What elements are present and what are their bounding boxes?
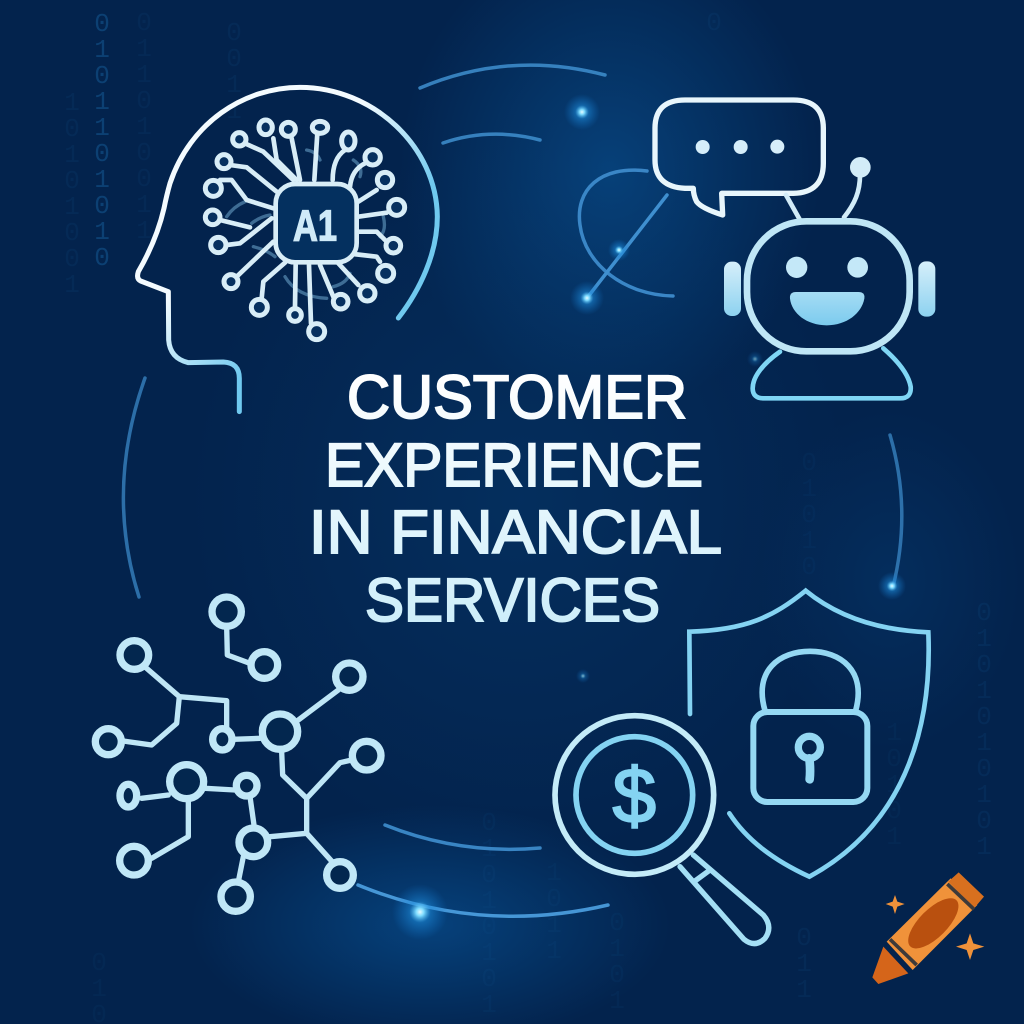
typing dots [696,140,784,154]
background binary digit columns: 01010101 [481,808,497,1020]
title [309,363,722,634]
network links [123,627,352,882]
sparkles [886,895,984,960]
background binary digit columns: 0101 [609,908,625,1016]
background binary digit columns: 1011 [546,858,562,966]
background binary digit columns: 10101 [886,718,902,852]
bubble connector and antenna [786,175,860,220]
padlock shackle [762,651,858,711]
title: EXPERIENCE [325,431,703,499]
AI chip [276,184,357,262]
background binary digit columns: 0101010101 [976,598,992,862]
circuit nodes [205,120,405,340]
icon: chat bubble and robot [655,100,935,398]
icon: AI head with circuit brain [138,87,437,412]
decorative orbit arcs [123,65,902,916]
head outline [138,87,437,412]
robot eyes [786,257,868,278]
robot ears [724,261,935,317]
network nodes [95,597,381,911]
crayon cap [948,872,984,908]
background binary digit columns: 011010011 [136,8,152,246]
icon: data network graph [95,597,381,911]
robot base [753,348,911,398]
title: SERVICES [365,566,660,634]
magnifier inner ring [576,737,693,853]
background binary digit columns: 011 [796,923,812,1005]
antenna tip [850,157,871,178]
crayon stripes [890,884,974,965]
crayon label ellipse [900,890,966,956]
background binary digit columns: 01010 [801,448,817,582]
icon: shield, padlock and magnifier [555,591,929,944]
background binary digit columns: 0011 [226,18,242,126]
faint brain swirls [227,150,384,298]
crayon body [887,878,977,970]
magnifier handle [680,855,769,944]
keyhole [798,736,820,779]
background binary digit columns: 0101101010 [94,9,110,273]
circuit branches [220,133,387,323]
dollar sign: $ [613,751,656,839]
shield [689,591,929,877]
title: CUSTOMER [347,363,687,431]
robot smile [790,292,864,325]
light glows [392,94,906,940]
chip label: A1 [293,201,337,250]
robot head [747,221,910,351]
icon: orange crayon watermark [872,872,984,984]
speech bubble [655,100,823,215]
background binary digit columns: 10101001 [64,88,80,300]
crayon tip [872,947,908,984]
background binary digit columns: 0 [706,8,722,38]
magnifier lens [555,716,714,874]
padlock body [753,712,867,802]
title: IN FINANCIAL [309,498,722,566]
